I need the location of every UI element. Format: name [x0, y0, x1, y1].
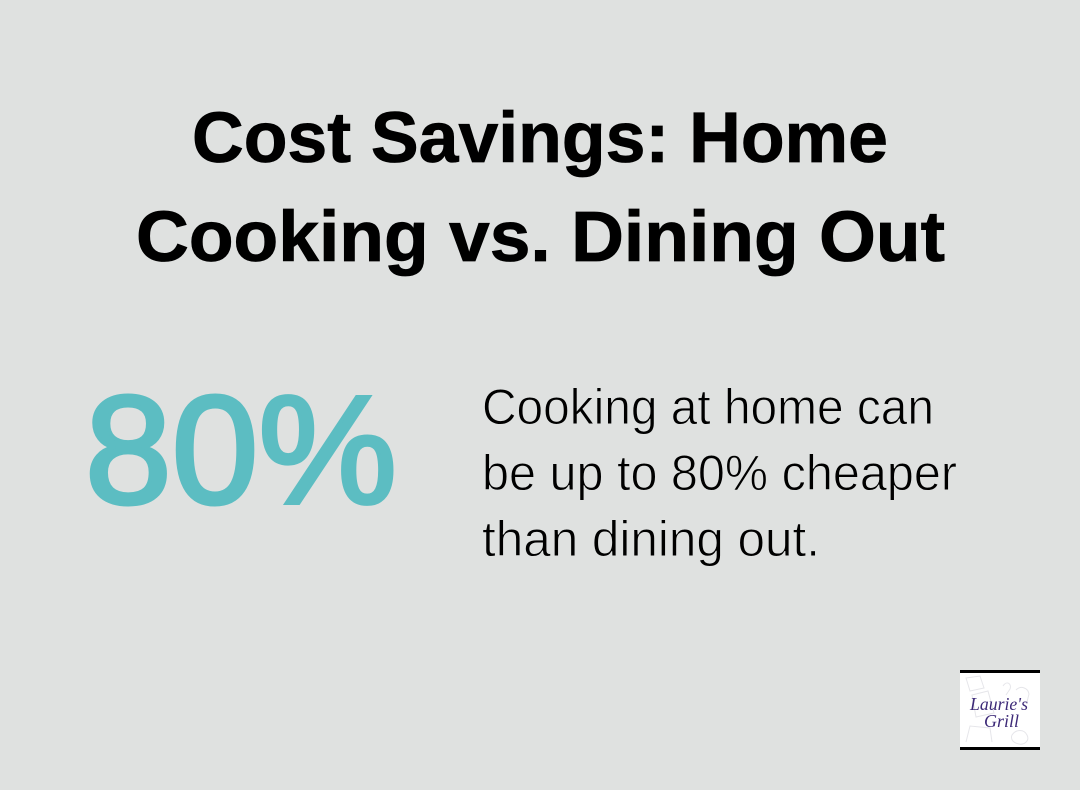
logo: Laurie's Grill: Laurie's	[969, 694, 1028, 714]
logo: Laurie's Grill: Grill	[984, 711, 1019, 731]
description text: Cooking at home can	[482, 379, 934, 435]
description text	[482, 379, 957, 567]
logo: Laurie's Grill	[960, 670, 1040, 750]
description text: than dining out.	[482, 511, 820, 567]
title: Cooking vs. Dining Out	[136, 198, 945, 277]
statistic: 80%: 80%	[85, 364, 397, 536]
title: Cost Savings: Home	[192, 99, 888, 178]
title	[136, 99, 945, 277]
description text: be up to 80% cheaper	[482, 445, 957, 501]
